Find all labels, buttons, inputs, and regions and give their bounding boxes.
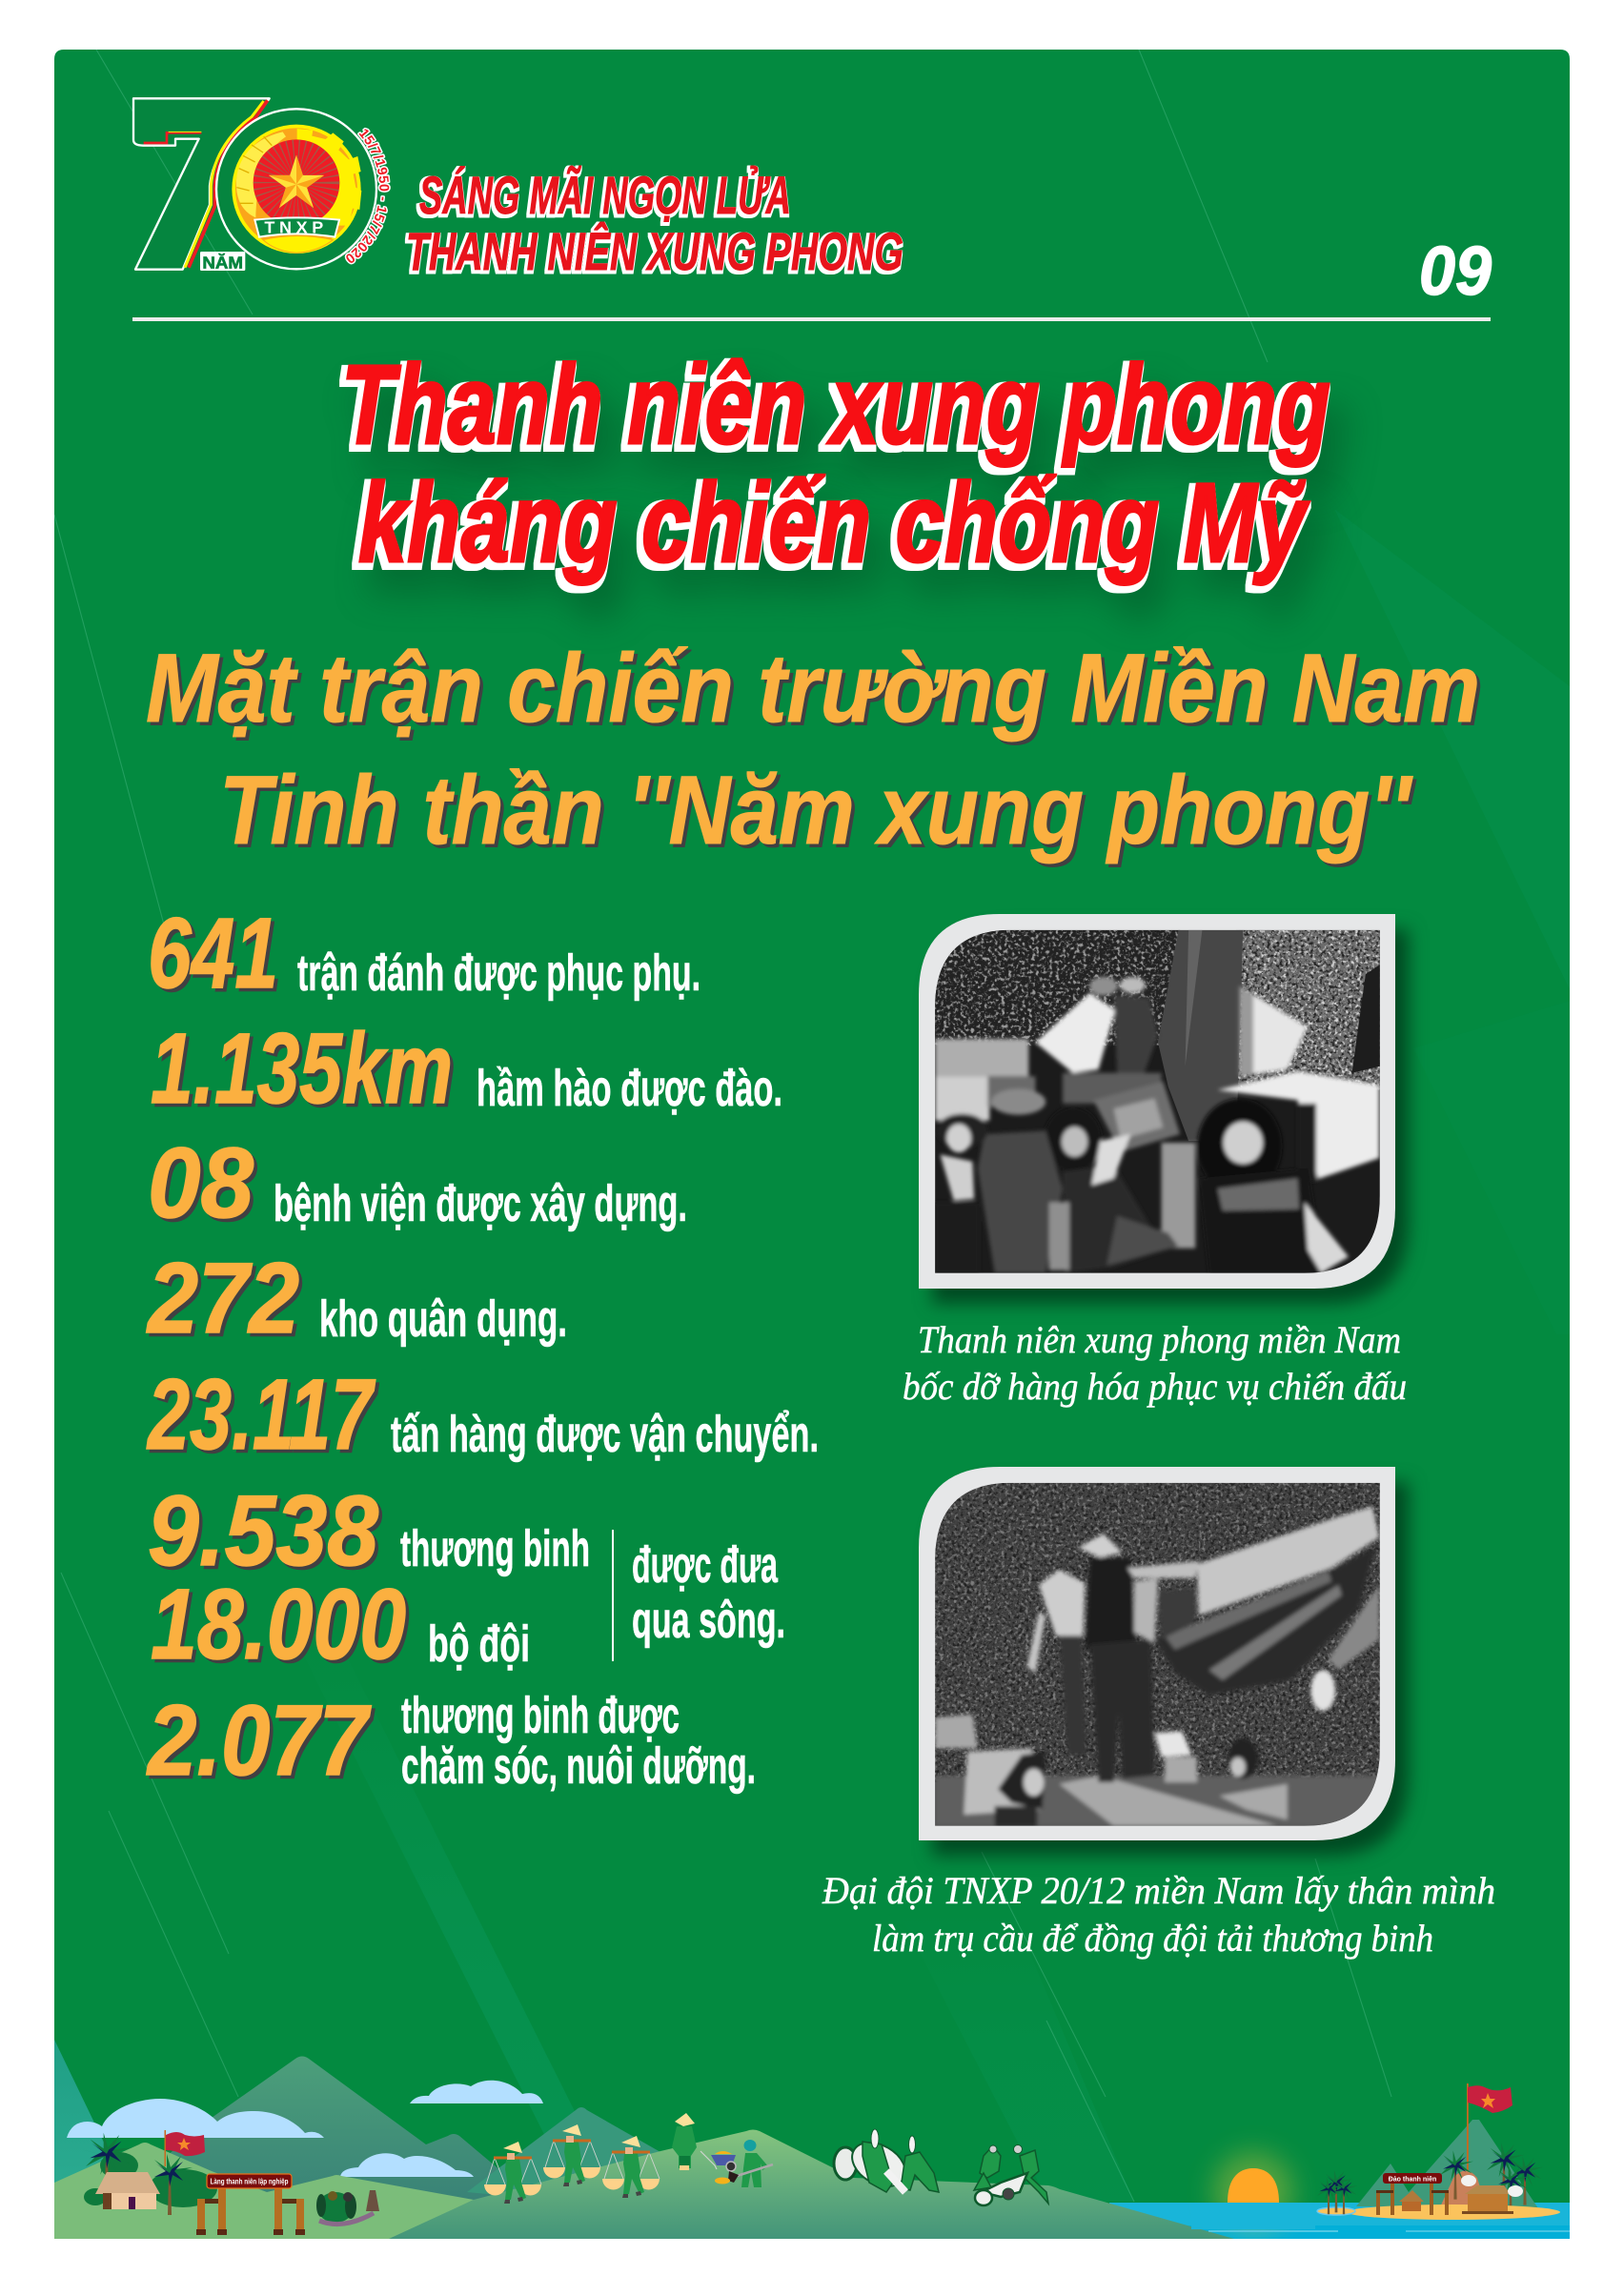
photo 1 caption: bốc dỡ hàng hóa phục vụ chiến đấu: [903, 1365, 1407, 1408]
stat: 23.117: [146, 1359, 819, 1471]
stats list: [146, 898, 819, 1797]
subtitle: [146, 634, 1480, 864]
stat: 2.077: [146, 1685, 756, 1797]
sign: island: [1383, 2173, 1442, 2184]
logo star: [269, 155, 324, 208]
logo numeral 7: [133, 98, 270, 270]
wheelbarrow: [700, 2151, 736, 2171]
stat: 9.538: thương binh: [400, 1520, 590, 1577]
light green hill: [54, 2143, 474, 2239]
logo white ring: [216, 109, 376, 269]
stat: 272: kho quân dụng.: [319, 1290, 567, 1348]
header rule: [132, 317, 1491, 321]
left village: [82, 2130, 379, 2235]
river crossing note: được đưa: [632, 1536, 779, 1594]
village gate: [196, 2174, 305, 2235]
photo 1 caption: Thanh niên xung phong miền Nam: [918, 1318, 1401, 1361]
photo 2 caption: làm trụ cầu để đồng đội tải thương binh: [872, 1917, 1433, 1960]
logo NĂM badge: NĂM: [202, 252, 243, 272]
front hill: [389, 2129, 1234, 2239]
flag left: [164, 2130, 205, 2166]
sign: island: Đảo thanh niên: [1389, 2177, 1436, 2183]
stat: 1.135km: 1.135km: [151, 1013, 453, 1125]
bottom scene: [54, 2040, 1570, 2239]
workers on hill: [484, 2113, 773, 2204]
stat: 1.135km: [151, 1013, 782, 1125]
logo: 70 năm TNXP: [132, 97, 391, 272]
stat: 23.117: tấn hàng được vận chuyển.: [391, 1406, 819, 1463]
sea: [1109, 2203, 1570, 2239]
stat: 272: [146, 1243, 567, 1354]
stat: 23.117: 23.117: [146, 1359, 376, 1471]
stat: 2.077: chăm sóc, nuôi dưỡng.: [401, 1737, 756, 1795]
stat: 641: 641: [148, 898, 278, 1009]
title: [341, 342, 1330, 586]
logo emblem: [232, 125, 361, 254]
header slogan: THANH NIÊN XUNG PHONG: [406, 221, 903, 281]
clouds: [67, 2081, 543, 2177]
photo 2 caption: Đại đội TNXP 20/12 miền Nam lấy thân mình: [822, 1869, 1495, 1912]
logo banner text: TNXP: [264, 218, 328, 237]
logo date on arc: 15/7/1950 - 15/7/2020: [345, 128, 391, 265]
mountains: [170, 2057, 660, 2203]
subtitle: Tinh thần ''Năm xung phong'': [219, 756, 1413, 864]
stat: 08: [148, 1128, 687, 1239]
stat: 08: 08: [148, 1128, 254, 1239]
stat: 9.538: [148, 1475, 590, 1587]
stat: 641: trận đánh được phục phụ.: [297, 945, 700, 1002]
title: Thanh niên xung phong: [341, 342, 1330, 468]
page number: 09: [1419, 234, 1492, 310]
river crossing note: [632, 1536, 785, 1649]
woman standing: [672, 2113, 697, 2170]
village gate: Làng thanh niên lập nghiệp: [210, 2177, 289, 2186]
stat: 641: [148, 898, 700, 1009]
title: kháng chiến chống Mỹ: [358, 460, 1309, 586]
island: [1315, 2083, 1560, 2220]
stat: 08: bệnh viện được xây dựng.: [274, 1175, 687, 1232]
flag right: [1468, 2085, 1512, 2113]
photo 1 caption: [903, 1318, 1407, 1408]
sun: [1191, 2152, 1338, 2232]
motorbike group 1: [834, 2129, 939, 2195]
villagers group: [316, 2190, 379, 2225]
stat: 18.000: 18.000: [151, 1569, 406, 1680]
river crossing note: qua sông.: [632, 1592, 785, 1649]
stat: 2.077: 2.077: [146, 1685, 372, 1797]
photo 2 caption: [822, 1869, 1495, 1960]
stat: 18.000: bộ đội: [428, 1615, 530, 1673]
stat: 2.077: thương binh được: [401, 1687, 680, 1744]
teal mountain left: [54, 2040, 104, 2183]
header slogan: [406, 165, 903, 281]
subtitle: Mặt trận chiến trường Miền Nam: [146, 634, 1480, 742]
stat: 9.538: 9.538: [148, 1475, 379, 1587]
stat: 1.135km: hầm hào được đào.: [477, 1060, 782, 1117]
stat: 272: 272: [146, 1243, 299, 1354]
header slogan: SÁNG MÃI NGỌN LỬA: [419, 165, 791, 225]
motorbike group 2: [974, 2144, 1048, 2205]
stilt house: [95, 2172, 160, 2209]
photo 2: human bridge: [822, 1467, 1495, 1960]
worker with shovel: [715, 2140, 773, 2187]
photo 1: loading goods: [903, 914, 1407, 1408]
